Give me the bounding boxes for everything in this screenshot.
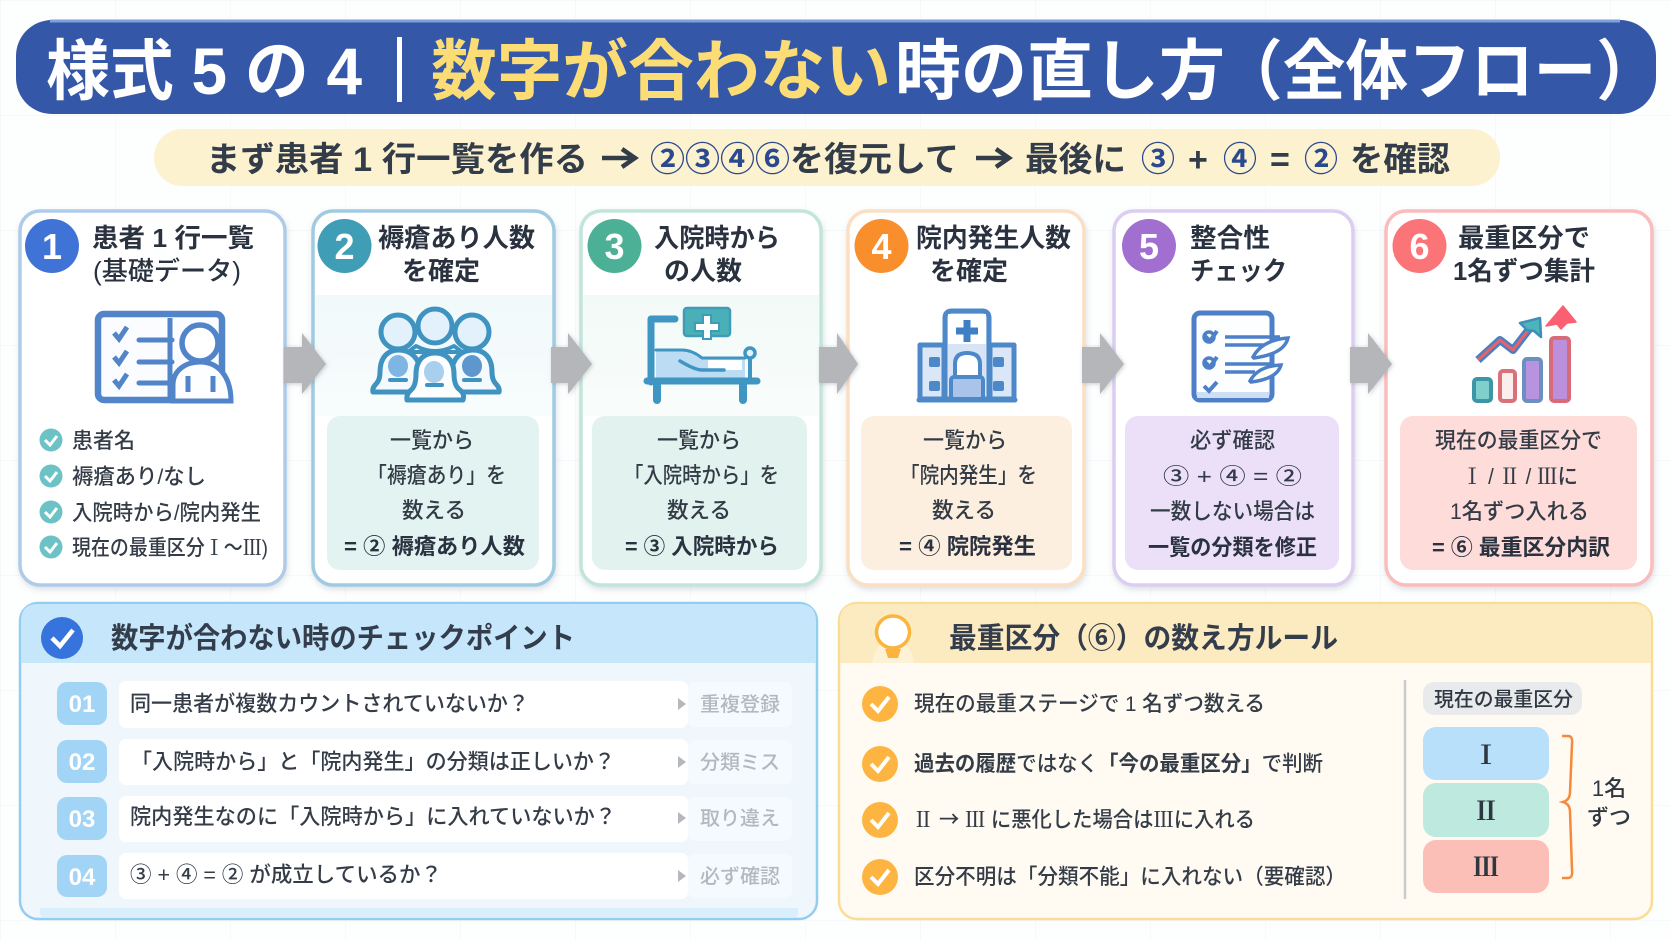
card 2 heading: 褥瘡あり人数	[378, 223, 535, 253]
icon: rising bar chart	[1474, 306, 1576, 401]
badge 5	[1122, 219, 1176, 273]
badge 2	[318, 219, 372, 273]
card 5 detail box: 必ず確認	[1190, 428, 1275, 453]
row 03: 03	[69, 806, 95, 833]
badge 6: 6	[1409, 226, 1430, 267]
rule 3: Ⅱ → Ⅲ に悪化した場合はⅢに入れる	[913, 803, 1255, 834]
row 04	[57, 853, 792, 899]
icon: list with person	[98, 314, 231, 401]
card 3: on-admission count	[581, 211, 821, 585]
card 6 detail box: 1名ずつ入れる	[1450, 499, 1589, 524]
card 3 detail box	[592, 416, 807, 570]
card 4 heading: 院内発生人数	[916, 223, 1071, 253]
card 1 heading: (基礎データ)	[93, 256, 241, 286]
row 03: 院内発生なのに「入院時から」に入れていないか？	[130, 805, 616, 829]
subtitle pill: 最後に	[1025, 141, 1126, 179]
subtitle pill: +	[1188, 141, 1208, 179]
card 3 heading	[654, 223, 780, 286]
subtitle pill	[154, 129, 1500, 186]
card 4: in-hospital count	[848, 211, 1084, 585]
badge 4: 4	[871, 226, 892, 267]
card 1 heading: 患者 1 行一覧	[92, 223, 254, 253]
icon: clipboard check	[1194, 313, 1288, 400]
badge 5: 5	[1139, 226, 1159, 267]
brace	[1562, 736, 1572, 878]
row 03	[57, 796, 792, 842]
rule 2	[862, 746, 1323, 782]
subtitle pill: ④	[1223, 141, 1257, 179]
icon: hospital building	[919, 311, 1015, 400]
brace label	[1587, 776, 1631, 830]
card 2: pressure ulcer count	[313, 211, 554, 585]
rule 1: 現在の最重ステージで 1 名ずつ数える	[914, 692, 1265, 716]
card 1 checklist: 入院時から/院内発生	[72, 501, 261, 525]
title banner: 時の直し方	[895, 34, 1225, 108]
row 01: 重複登録	[700, 693, 780, 716]
card 4 detail box: 一覧から	[923, 428, 1007, 453]
subtitle pill: =	[1270, 141, 1290, 179]
arrow 5	[1350, 333, 1392, 394]
card 5 detail box: 一覧の分類を修正	[1148, 535, 1317, 560]
row 01: 同一患者が複数カウントされていないか？	[130, 692, 529, 716]
row 03: 取り違え	[700, 807, 780, 830]
stage boxes: Ⅲ	[1473, 847, 1499, 884]
rule 4: 区分不明は「分類不能」に入れない（要確認）	[914, 865, 1346, 889]
icon: group of people	[373, 309, 499, 400]
row 04: 04	[69, 864, 96, 891]
card 3 detail box: 数える	[667, 498, 731, 523]
brace label: ずつ	[1587, 805, 1631, 830]
subtitle pill: まず患者 1 行一覧を作る	[206, 141, 588, 179]
card 2 detail box: 「褥瘡あり」を	[367, 463, 506, 488]
rule 1	[862, 686, 1265, 722]
badge 1: 1	[42, 226, 62, 267]
card 5 heading: チェック	[1190, 256, 1287, 286]
checkpoints heading: 数字が合わない時のチェックポイント	[111, 621, 575, 655]
rule 4	[862, 859, 1346, 895]
card 3 heading: 入院時から	[654, 223, 780, 253]
brace label: 1名	[1592, 776, 1626, 801]
row 01: 01	[69, 691, 95, 718]
rules heading: 最重区分（⑥）の数え方ルール	[949, 622, 1338, 655]
card 6: worst stage tally	[1386, 211, 1652, 585]
title banner: 様式 5 の 4	[46, 34, 362, 108]
card 1 checklist: 褥瘡あり/なし	[72, 465, 206, 489]
card 6 heading	[1453, 223, 1595, 286]
stage boxes: Ⅰ	[1473, 735, 1499, 772]
subtitle pill: を復元して	[790, 141, 959, 179]
card 1 checklist: 患者名	[72, 429, 135, 453]
card 4 detail box: 「院内発生」を	[900, 463, 1037, 488]
stage boxes	[1423, 727, 1549, 893]
row 04: 必ず確認	[700, 865, 780, 888]
card 6 detail box: 現在の最重区分で	[1435, 428, 1602, 453]
card 6 heading: 最重区分で	[1458, 223, 1590, 253]
card 2 detail box: = ② 褥瘡あり人数	[344, 534, 525, 559]
card 2 detail box	[327, 416, 539, 570]
subtitle pill: ②③④⑥	[650, 141, 790, 179]
row 02: 02	[69, 749, 95, 776]
row 02: 「入院時から」と「院内発生」の分類は正しいか？	[131, 750, 615, 774]
card 2 heading	[378, 223, 535, 286]
badge 1	[25, 219, 79, 273]
card 1: patient list	[20, 211, 285, 585]
badge 4	[854, 219, 908, 273]
card 1 checklist: 現在の最重区分Ⅰ～Ⅲ)	[72, 531, 268, 562]
title banner	[16, 20, 1659, 114]
title banner: 数字が合わない	[431, 34, 891, 108]
card 6 detail box: = ⑥ 最重区分内訳	[1432, 535, 1610, 560]
card 6 detail box: Ⅰ / Ⅱ / Ⅲに	[1462, 460, 1578, 491]
subtitle pill: ②	[1304, 141, 1338, 179]
card 4 detail box: = ④ 院院発生	[899, 534, 1036, 559]
card 3 detail box: 「入院時から」を	[624, 463, 779, 488]
card 2 heading: を確定	[402, 256, 480, 286]
arrow 2	[551, 333, 592, 394]
card 5 detail box	[1125, 416, 1339, 570]
card 4 detail box: 数える	[932, 498, 996, 523]
check icon	[41, 617, 83, 659]
card 5 detail box: ③ + ④ = ②	[1163, 464, 1302, 489]
card 2 detail box: 一覧から	[390, 428, 474, 453]
subtitle pill: を確認	[1350, 141, 1450, 179]
subtitle pill: ③	[1141, 141, 1175, 179]
stage chip: 現在の最重区分	[1434, 688, 1573, 711]
card 5: consistency check	[1114, 211, 1353, 585]
title banner: （全体フロー）	[1220, 34, 1659, 108]
badge 2: 2	[334, 226, 355, 267]
card 1 checklist	[40, 428, 268, 562]
badge 6	[1392, 219, 1446, 273]
arrow 4	[1082, 333, 1124, 394]
card 3 detail box: 一覧から	[657, 428, 741, 453]
card 6 heading: 1名ずつ集計	[1453, 256, 1595, 286]
card 5 heading: 整合性	[1190, 223, 1270, 253]
badge 3: 3	[604, 226, 625, 267]
card 4 heading: を確定	[930, 256, 1008, 286]
stage chip	[1423, 682, 1582, 715]
rule 2: 過去の履歴ではなく「今の最重区分」で判断	[914, 752, 1323, 776]
badge 3	[588, 219, 642, 273]
card 5 heading	[1190, 223, 1287, 286]
card 3 heading: の人数	[664, 256, 742, 286]
card 4 heading	[916, 223, 1071, 286]
arrow 3	[819, 333, 858, 394]
row 02	[57, 739, 792, 785]
card 2 detail box: 数える	[402, 498, 466, 523]
row 04: ③ + ④ = ② が成立しているか？	[130, 863, 442, 887]
arrow 1	[284, 333, 326, 394]
card 1 heading	[92, 223, 254, 286]
icon: light bulb	[872, 616, 914, 663]
card 5 detail box: 一数しない場合は	[1150, 499, 1315, 524]
stage boxes: Ⅱ	[1473, 791, 1499, 828]
row 01	[57, 681, 792, 728]
card 4 detail box	[861, 416, 1072, 570]
row 02: 分類ミス	[700, 751, 780, 774]
panel: counting rules	[839, 603, 1652, 919]
icon: hospital bed	[647, 308, 757, 400]
card 3 detail box: = ③ 入院時から	[625, 534, 779, 559]
card 6 detail box	[1400, 416, 1637, 570]
panel: checkpoints	[20, 603, 817, 919]
